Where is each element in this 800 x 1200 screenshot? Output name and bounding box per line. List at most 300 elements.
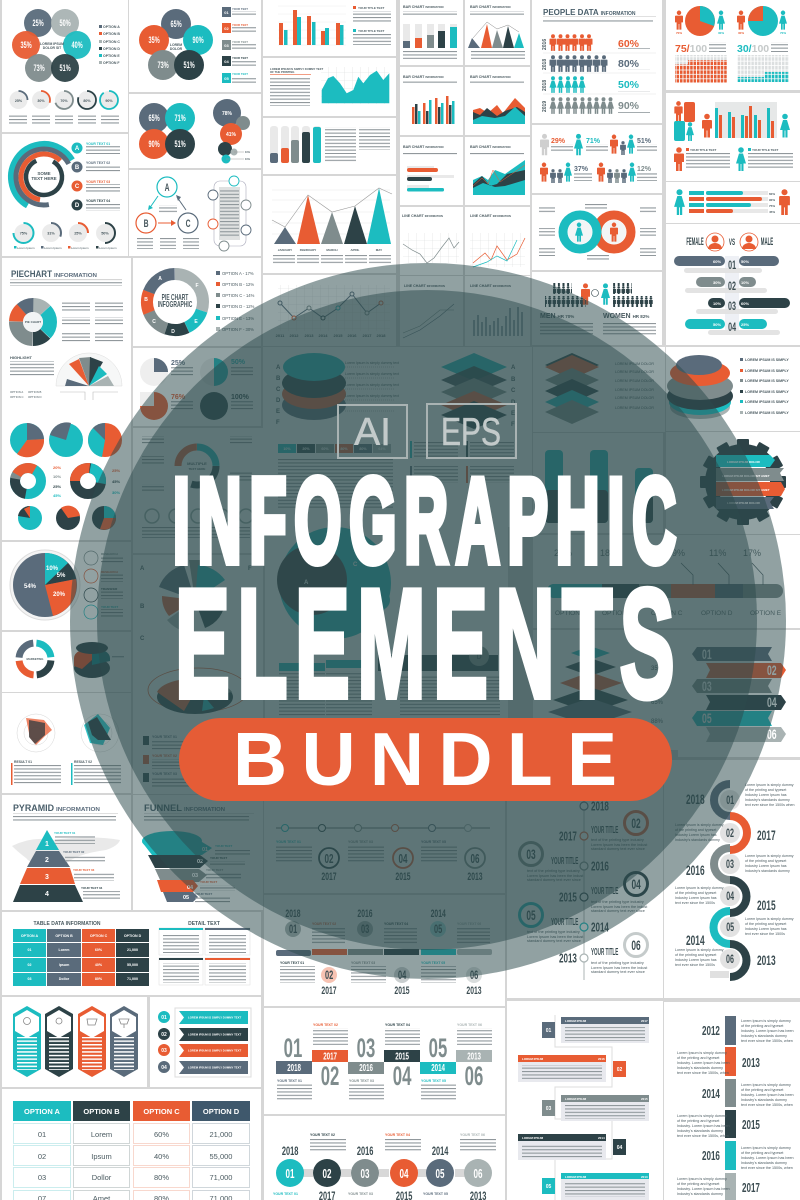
panel: four circles and bubbles: 11% [245,158,251,161]
panel: vertical year bar timeline: 2012 [702,1024,720,1039]
panel: triangle peak chart: FEBRUARY [300,248,316,252]
panel: stepped number timeline: 04 [393,1061,412,1091]
panel: stepped number timeline: YOUR TEXT 03 [349,1079,374,1083]
panel: disc stack with labels: C [276,387,281,393]
panel: female versus male: 60% [713,259,721,264]
panel: vertical line timeline: Lorem Ipsum has been the indust [591,905,648,909]
panel: segmented percentage bar: 17% [743,548,761,558]
panel: vertical line timeline: 05 [526,909,536,924]
panel: pie chart infographic donut: OPTION C - 14% [222,293,255,298]
panel: pie chart infographic donut: E [194,319,198,325]
panel: table data and detail text: 21,000 [127,948,138,952]
panel: segmented percentage bar [533,535,800,628]
panel: vertical line timeline: 2015 [559,891,577,905]
panel: serpentine timeline: 2015 [757,899,776,914]
panel: six circle percentages: 73% [34,63,45,73]
panel: segmented percentage bar: 11% [709,548,726,558]
panel: four circles and bubbles: 90% [149,139,160,149]
panel: radar charts [2,693,131,793]
panel: layered diamonds: LOREM IPSUM DOLOR [615,388,654,392]
panel: vertical line timeline [507,760,663,998]
panel: five circles with numbered list: 51% [184,60,195,70]
panel: people percentages: 51% [637,138,652,145]
panel: people data information: 2018 [542,59,548,70]
panel: arrow ribbons: 06 [767,727,777,743]
panel: concentric donut with options: 31% [47,232,55,236]
panel: female versus male [666,224,800,345]
panel: A B C cycle and option loop: B [144,217,149,229]
panel: vertical line timeline: 2016 [591,860,609,874]
panel: serpentine timeline: Lorem Ipsum is simply dummy [745,854,794,858]
panel: stacked discs legend: LOREM IPSUM IS SIMPLY [745,400,789,404]
panel: timeline with colored bar: 03 [361,923,370,937]
panel: segmented percentage bar: OPTION A [555,610,586,617]
panel: female versus male: 30% [713,280,721,285]
panel: people percentages [532,125,662,193]
panel: pie chart infographic donut: OPTION B - 12% [222,282,254,287]
panel: large pie with icons: TRANSFER [101,587,118,591]
panel: pyramid information: YOUR TEXT 02 [63,850,85,854]
panel: funnel information: 02 [197,859,203,865]
panel: option table: Ipsum [91,1152,112,1161]
panel: pyramid layers [533,630,678,750]
badge: EPS: EPS [441,411,501,454]
panel: circle chain timeline: 2018 [282,1145,299,1159]
panel: vertical line timeline: YOUR TITLE [591,823,618,835]
panel: option table: Lorem [91,1130,112,1139]
panel: vertical year bar timeline: of the printing and typeset [677,1119,719,1123]
panel: staggered card timeline: 2016 [598,1057,605,1061]
panel: multiple donut steps: TEXT HERE [189,467,205,471]
panel: stepped number timeline: 2014 [431,1061,445,1073]
panel: serpentine timeline: Industry Lorem Ipsum has [675,896,717,900]
panel: pie chart information: HIGHLIGHT [10,355,33,360]
panel: female versus male: 03 [728,300,736,314]
panel: timeline with ring nodes: YOUR TEXT 05 [421,840,446,844]
panel: circle chain timeline: 2016 [357,1145,374,1159]
panel: pyramid layers: 35% [651,666,664,672]
panel: pie chart information: INFORMATION [54,273,97,279]
panel: serpentine timeline: Industry's standards dummy [745,798,790,802]
panel: stepped number timeline: 2013 [467,1050,481,1062]
panel: vertical line timeline: Lorem Ipsum has been the indust [591,966,648,970]
panel: serpentine timeline: 03 [726,858,734,872]
panel: timeline with colored bar: YOUR TEXT 03 [351,961,375,965]
panel: serpentine timeline: 06 [726,953,734,967]
panel: staggered card timeline: 2014 [598,1136,605,1140]
panel: table data and detail text: TABLE DATA INFORMATION [34,921,101,927]
panel: disc stack with labels: B [276,376,281,382]
panel: vertical year bar timeline: Industry's standards dummy [741,1161,787,1165]
panel: funnel information: FUNNEL [144,803,183,813]
panel: funnel information: YOUR TEXT [210,856,227,860]
panel: circle chain timeline: YOUR TEXT 02 [310,1133,335,1137]
panel: disc stack with labels: Lorem Ipsum is simply dummy text [345,394,399,398]
panel: triangle peak chart: MAY [376,248,382,252]
panel: pyramid information: INFORMATION [56,807,100,813]
panel: five circles with numbered list [129,0,261,92]
panel: vertical year bar timeline: Lorem Ipsum is simply dummy [677,1051,727,1055]
panel: staggered card timeline: 05 [546,1184,551,1190]
panel: table data and detail text: 80% [95,977,103,981]
panel: numbered arrow banners: LOREM IPSUM IS SIMPLY DUMMY TEXT [188,1066,242,1070]
panel: timeline with ring nodes: 06 [471,852,479,867]
panel: funnel information: 01 [202,847,208,853]
panel: circle chain timeline: 2014 [432,1145,449,1159]
panel: option table: 03 [38,1173,46,1182]
panel: vertical line timeline: 06 [631,939,641,954]
panel: six circle percentages: DOLOR SIT [43,46,62,50]
panel: six circle percentages: OPTION F [103,61,120,65]
panel: marked line chart: 2012 [290,333,299,338]
panel: vertical line timeline: 2017 [559,830,577,844]
panel: people data information: 2016 [542,39,548,50]
panel: vertical year bar timeline: of the printing and typeset [677,1056,719,1060]
panel: people data information: 2018 [542,80,548,91]
panel: radar charts: RESULT 02 [74,760,92,764]
panel: bar chart small set: BAR CHART INFORMATION [470,145,511,149]
panel: percentage pies [133,348,261,426]
panel: disc stack with labels: 20% [302,447,310,451]
panel: cylinder columns [263,118,396,174]
panel: concentric donut with options: SOME [37,171,51,176]
panel: marked line chart: 2011 [276,333,285,338]
panel: bar chart small set: BAR CHART INFORMATION [403,75,444,79]
panel: pie chart infographic donut: OPTION D - 12% [222,304,255,309]
panel: segmented percentage bar: OPTION C [651,610,683,617]
panel: table data and detail text: DETAIL TEXT [188,921,220,927]
panel: bar chart small set: BAR CHART INFORMATION [403,5,444,9]
panel: vertical line timeline: 04 [632,878,641,893]
panel: concentric donut with options: Lorem Ipsum [99,246,117,250]
panel: bar chart small set: BAR CHART INFORMATION [470,75,511,79]
panel: stepped number timeline: YOUR TEXT 05 [421,1079,446,1083]
panel: bar chart small set: LINE CHART INFORMATION [404,284,445,288]
panel: three pies and donuts: 25% [112,468,120,473]
panel: serpentine timeline: 2016 [686,864,705,879]
panel: funnel information: YOUR TEXT [195,892,212,896]
panel: pie chart information: PIECHART [11,269,52,280]
panel: five circles with numbered list: YOUR TEXT [232,23,248,27]
panel: teal area chart: OF THE PRINTING [270,70,294,74]
panel: four circles and bubbles: 71% [175,113,186,123]
panel: female versus male: 50% [713,322,721,327]
panel: table data and detail text: 01 [28,948,32,952]
panel: timeline with colored bar: YOUR TEXT 06 [457,922,481,926]
panel: pyramid layers: 50% [651,683,664,689]
panel: triangle peak chart [263,176,396,273]
panel: five circles with numbered list: YOUR TEXT [232,7,248,11]
panel: vertical year bar timeline: Industry. Lorem Ipsum has been [677,1124,730,1128]
panel: serpentine timeline: 2013 [757,954,776,969]
panel: six circle percentages: 51% [60,63,71,73]
panel: stacked discs legend: LOREM IPSUM IS SIMPLY [745,358,789,362]
panel: circle chain timeline: YOUR TEXT 04 [385,1133,410,1137]
panel: vertical year bar timeline: of the printing and typeset [677,1182,719,1186]
panel: serpentine timeline: Industry Lorem Ipsum has [745,793,787,797]
panel: serpentine timeline: text ever since the 1500s [675,963,715,967]
panel: circle chain timeline: 05 [436,1167,444,1182]
panel: vertical year bar timeline: of the printing and typeset [741,1024,783,1028]
panel: serpentine timeline: Industry's standards dummy [745,869,790,873]
panel: bar chart small set [400,0,530,346]
panel: table data and detail text: 71,000 [127,977,138,981]
panel: venn and cards [265,527,508,730]
panel: timeline with colored bar: 01 [289,923,298,937]
panel: arrow ribbons [678,630,800,757]
panel: three pies and donuts: 20% [53,465,61,470]
panel: serpentine timeline: of the printing and typeset [675,953,716,957]
panel: staggered card timeline: LOREM IPSUM [565,1175,587,1179]
panel: vertical line timeline: 2013 [559,952,577,966]
panel: concentric donut with options: YOUR TEXT 04 [86,199,110,203]
panel: segmented percentage bar: OPTION E [750,610,782,617]
panel: pyramid information: YOUR TEXT 03 [73,868,95,872]
panel: people data information: 80% [618,58,640,70]
panel: serpentine timeline: text ever since the 1500s [745,932,785,936]
panel: gender horizontal bars: 75% [769,204,775,208]
panel: male and female pies: 30/100 [737,43,769,55]
panel: A B C cycle and option loop: A [165,181,170,193]
panel: serpentine timeline: of the printing and typeset [675,828,716,832]
panel: table data and detail text: OPTION D [124,934,142,938]
panel: arrow ribbons: 01 [702,647,712,663]
panel: numbered arrow banners [150,997,261,1087]
panel: percentage pies: 100% [231,394,250,401]
panel: six circle percentages: 25% [33,18,44,28]
panel: multiple donut steps [133,428,263,553]
panel: bar chart small set: BAR CHART INFORMATION [403,145,444,149]
panel: female versus male: FEMALE [686,235,704,247]
panel: timeline with colored bar: YOUR TEXT 01 [280,961,304,965]
panel: pie chart infographic donut: OPTION A - 17% [222,271,254,276]
panel: vertical year bar timeline: Industry. Lorem Ipsum has been [677,1061,730,1065]
badge: EPS [427,404,516,458]
panel: timeline with colored bar: YOUR TEXT 04 [384,922,408,926]
panel: circle chain timeline: 03 [361,1167,369,1182]
panel: staggered card timeline: 04 [617,1145,622,1151]
panel: pyramid information: YOUR TEXT 04 [81,886,103,890]
panel: serpentine timeline: Lorem Ipsum is simply dummy [675,886,724,890]
panel: option table: 71,000 [210,1173,232,1182]
panel: people percentages: 37% [574,166,589,173]
panel: numbered arrow banners: 01 [161,1015,167,1021]
panel: disc stack with labels: D [276,398,281,404]
panel: A B C cycle and option loop [129,170,261,256]
panel: stepped number timeline: 2017 [323,1050,337,1062]
panel: pie chart infographic donut: OPTION E - 13% [222,316,254,321]
panel: female versus male: MALE [761,235,773,247]
panel: female versus male: 02 [728,280,736,294]
panel: numbered arrow banners: LOREM IPSUM IS SIMPLY DUMMY TEXT [188,1048,242,1052]
panel: vertical line timeline: YOUR TITLE [591,884,618,896]
panel: timeline with ring nodes: 04 [399,852,407,867]
panel: people data information: PEOPLE DATA INFORMATION [543,8,636,17]
panel: people data information: 2019 [542,101,548,112]
panel: 3D pie with text rows: YOUR TEXT 02 [152,754,177,758]
panel: pyramid information: 4 [45,891,49,898]
panel: percentage pies: 50% [231,359,246,366]
panel: segmented percentage bar: 21% [554,548,572,558]
panel: serpentine timeline [664,760,800,998]
panel: pie chart infographic donut [133,258,261,346]
panel: timeline with ring nodes: 2013 [467,870,483,882]
panel: serpentine timeline: 04 [726,890,735,904]
panel: table data and detail text: 60% [95,948,103,952]
panel: serpentine timeline: text ever since the 1500s [675,901,715,905]
panel: six circle percentages: 80% [83,99,91,103]
panel: percentage pies: 76% [171,394,186,401]
panel: concentric donut with options: YOUR TEXT 01 [86,142,110,146]
panel: concentric donut with options: 50% [101,232,109,236]
panel: timeline with colored bar: 2018 [285,907,301,919]
panel: concentric donut with options: C [75,184,80,190]
panel: vertical year bar timeline: 2017 [742,1181,760,1196]
panel: large pie with icons: 5% [57,573,66,579]
panel: timeline with colored bar: 04 [398,969,407,983]
panel: female versus male: 50% [741,259,749,264]
panel: disc stack with labels: F [511,422,515,428]
panel: six circle percentages [2,0,128,132]
panel: serpentine timeline: Industry's standards dummy [675,838,720,842]
panel: large pie with icons: RESEARCH [101,552,118,556]
panel: vertical year bar timeline: of the printing and typeset [741,1088,783,1092]
panel: table data and detail text: Dollor [59,977,70,981]
panel: circle chain timeline: 02 [323,1167,331,1182]
panel: bar chart small set: LINE CHART INFORMATION [470,214,511,218]
panel: concentric donut with options: YOUR TEXT 02 [86,161,110,165]
panel: staggered card timeline: 2017 [641,1019,648,1023]
panel: stepped number timeline: YOUR TEXT 01 [277,1079,302,1083]
panel: radar charts: RESULT 01 [14,760,32,764]
panel: five circles with numbered list: 90% [193,35,204,45]
panel: pyramid information [2,795,131,910]
panel: exploded pie: A [140,566,145,572]
panel: stacked discs legend: LOREM IPSUM IS SIMPLY [745,379,789,383]
panel: pyramid information: 3 [45,874,49,881]
panel: serpentine timeline: Industry Lorem Ipsum has [745,864,787,868]
panel: vertical year bar timeline: Industry's standards dummy [741,1034,787,1038]
panel: percentage pies: 25% [171,360,186,367]
panel: exploded pie: C [140,636,145,642]
panel: six circle percentages: OPTION C [103,40,120,44]
panel: large pie with icons: 10% [46,566,59,572]
panel: option table [2,1089,261,1200]
panel: tubes and segmented bar [533,433,663,533]
panel: timeline with colored bar: YOUR TEXT 02 [312,922,336,926]
panel: timeline with colored bar: 06 [470,969,479,983]
panel: vertical year bar timeline: Industry's standards dummy [677,1129,723,1133]
panel: vertical year bar timeline: Lorem Ipsum is simply dummy [677,1114,727,1118]
panel: vertical line timeline: text of the printing type industry [591,900,644,904]
panel: layered diamonds: LOREM IPSUM DOLOR [615,379,654,383]
panel: pie chart infographic donut: OPTION F - 30% [222,327,254,332]
panel: people percentages: 12% [637,166,652,173]
panel: arrow ribbons: 03 [702,679,712,695]
panel: three pies and donuts: 45% [112,479,120,484]
panel: exploded pie [133,555,263,662]
panel: vertical year bar timeline: Industry. Lorem Ipsum has been [741,1093,794,1097]
panel: funnel information: 04 [187,885,194,891]
panel: concentric donut with options: Lorem Ipsum [44,246,62,250]
panel: timeline with ring nodes: YOUR TEXT 03 [348,840,373,844]
panel: orange and teal bar chart: YOUR TITLE TEXT [358,6,385,10]
panel: serpentine timeline: Industry Lorem Ipsum has [745,927,787,931]
panel: stacked discs legend: LOREM IPSUM IS SIMPLY [745,411,789,415]
panel: six circle percentages: 25% [15,99,23,103]
panel: disc stack with labels: 60% [321,447,329,451]
panel: concentric donut with options: A [75,146,80,152]
panel: timeline with ring nodes [264,730,505,893]
panel: female versus male: 10% [713,301,721,306]
panel: marked line chart: 2013 [305,333,314,338]
panel: arrow ribbons: 02 [767,663,777,679]
panel: disc stack with labels: D [511,400,516,406]
panel: vertical line timeline: 2018 [591,800,609,814]
panel: four circles and bubbles: 78% [222,111,233,117]
panel: numbered arrow banners: 02 [161,1032,167,1038]
panel: funnel information: YOUR TEXT [206,868,223,872]
panel: large pie with icons: 54% [24,584,37,590]
panel: layered diamonds: LOREM IPSUM DOLOR [615,396,654,400]
panel: numbered arrow banners: 03 [161,1048,167,1054]
panel: teal area chart: LOREM IPSUM IS SIMPLY DUMMY TEXT [270,67,324,71]
panel: vertical line timeline: standard dummy text ever since [527,878,581,882]
panel: option table: 40% [154,1152,169,1161]
panel: gender tall bars [666,93,800,181]
panel: bar chart small set: BAR CHART INFORMATION [470,5,511,9]
panel: vertical line timeline: text of the printing type industry [591,838,644,842]
panel: table data and detail text: OPTION A [21,934,39,938]
panel: three pies and donuts: 25% [53,484,61,489]
panel: six circle percentages: 50% [60,18,71,28]
panel: gender horizontal bars: 60% [769,192,775,196]
panel: stacked discs legend: LOREM IPSUM IS SIMPLY [745,390,789,394]
panel: disc stack with labels: 80% [359,447,367,451]
panel: people data information: 60% [618,38,640,50]
panel: serpentine timeline: of the printing and typeset [745,788,786,792]
panel: arrow ribbons: 05 [702,711,712,727]
panel: option table: OPTION D [203,1107,240,1116]
panel: gender horizontal bars [666,182,800,223]
panel: marked line chart: 2015 [334,333,343,338]
panel: option table: 60% [154,1130,169,1139]
panel: vertical year bar timeline [664,1002,800,1200]
panel: concentric donut with options: Lorem Ipsum [17,246,35,250]
icon: gear with ribbons: LOREM IPSUM DOLOR SIT AMET [722,488,770,492]
panel: funnel information: 05 [183,895,189,901]
panel: numbered arrow banners: 04 [161,1065,167,1071]
panel: circle chain timeline: 06 [474,1167,482,1182]
panel: circle chain timeline: YOUR TEXT 01 [273,1192,298,1196]
panel: vertical year bar timeline: Lorem Ipsum is simply dummy [741,1019,791,1023]
panel: timeline with colored bar: 02 [325,969,334,983]
panel: marked line chart: 2016 [348,333,357,338]
panel: five circles with numbered list: 01 [224,10,229,15]
panel: circle chain timeline: 04 [400,1167,408,1182]
panel: funnel information: YOUR TEXT [215,844,232,848]
panel: vertical line timeline: text of the printing type industry [527,869,580,873]
panel: people percentages: 29% [551,138,566,145]
panel: female versus male: 25% [741,322,749,327]
panel: arrow ribbons: 04 [767,695,777,711]
panel: stepped number timeline: 01 [284,1033,302,1063]
panel: staggered card timeline [507,1001,663,1200]
panel: vertical line timeline: YOUR TITLE [551,915,578,927]
panel: pyramid layers: 88% [651,719,664,725]
panel: venn and cards: C [353,562,358,568]
panel: vertical line timeline: 02 [631,817,641,832]
